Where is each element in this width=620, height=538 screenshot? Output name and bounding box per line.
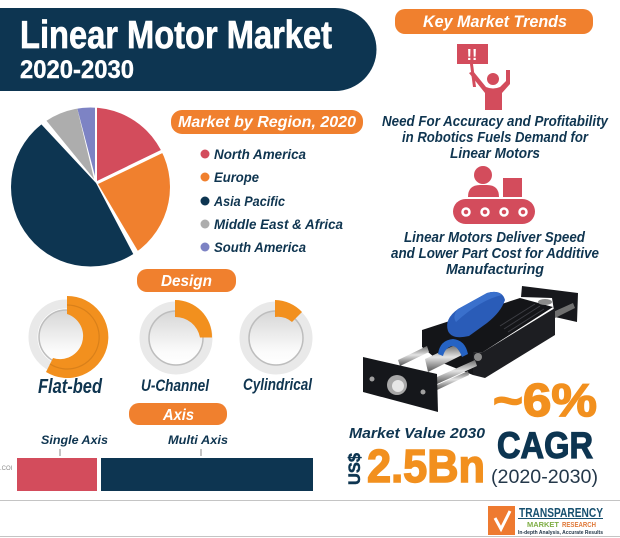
text: trend 1: in Robotics Fuels Demand for: [402, 129, 589, 146]
axis bar chart: .COI: [0, 466, 13, 472]
heading: design: [137, 269, 236, 292]
axis labels: Single Axis: [41, 435, 108, 447]
text: trend 2: [391, 229, 599, 278]
text: trend 2: and Lower Part Cost for Additive: [391, 245, 599, 262]
heading: market by region: Market by Region, 2020: [178, 114, 356, 131]
donut: u-channel: [141, 300, 212, 395]
title banner: 2020-2030: [20, 56, 134, 84]
legend: regions: Europe: [214, 169, 259, 185]
stat: cagr: CAGR: [497, 425, 593, 466]
heading: axis: Axis: [162, 407, 194, 424]
stat: cagr: (2020-2030): [491, 467, 598, 488]
logo: transparency market research: [488, 505, 603, 536]
footer rules: [0, 500, 620, 537]
heading: key market trends: Key Market Trends: [423, 13, 567, 31]
stat: cagr: ~6%: [493, 374, 597, 426]
icon: worker at conveyor: [453, 166, 535, 224]
stat: market value 2030: Market Value 2030: [349, 426, 485, 442]
legend: regions: South America: [214, 239, 306, 255]
axis labels: [41, 435, 228, 456]
legend: regions: North America: [214, 146, 306, 162]
illustration: linear motor: [363, 286, 578, 412]
stat: market value 2030: US$: [345, 452, 364, 485]
donut: cylindrical: Cylindrical: [243, 376, 312, 394]
logo: transparency market research: In-depth Analysis, Accurate Results: [518, 530, 603, 536]
donut: flat-bed: Flat-bed: [38, 376, 103, 398]
axis labels: Multi Axis: [168, 435, 228, 447]
text: trend 1: [382, 113, 609, 162]
icon: person holding sign: !!: [467, 47, 477, 64]
text: trend 1: Linear Motors: [450, 145, 540, 162]
title banner: [0, 8, 376, 91]
stat: cagr: [491, 374, 598, 488]
heading: axis: [129, 403, 227, 425]
heading: key market trends: [395, 9, 593, 34]
logo: transparency market research: RESEARCH: [562, 520, 596, 529]
logo: transparency market research: MARKET: [527, 520, 559, 529]
legend: regions: Middle East & Africa: [214, 216, 343, 232]
title banner: Linear Motor Market: [20, 14, 332, 57]
legend: regions: [200, 146, 343, 255]
pie chart: market by region: [11, 108, 170, 266]
heading: market by region: [171, 110, 363, 134]
stat: market value 2030: [345, 426, 485, 492]
stat: market value 2030: 2.5Bn: [367, 440, 485, 492]
axis bar chart: [0, 458, 313, 491]
text: trend 2: Manufacturing: [446, 261, 544, 278]
icon: person holding sign: [457, 44, 510, 110]
legend: regions: Asia Pacific: [213, 193, 285, 209]
donut: u-channel: U-Channel: [141, 377, 209, 395]
text: trend 2: Linear Motors Deliver Speed: [404, 229, 586, 246]
donut: flat-bed: [33, 296, 108, 398]
heading: design: Design: [161, 273, 212, 290]
donut: cylindrical: [243, 300, 312, 394]
